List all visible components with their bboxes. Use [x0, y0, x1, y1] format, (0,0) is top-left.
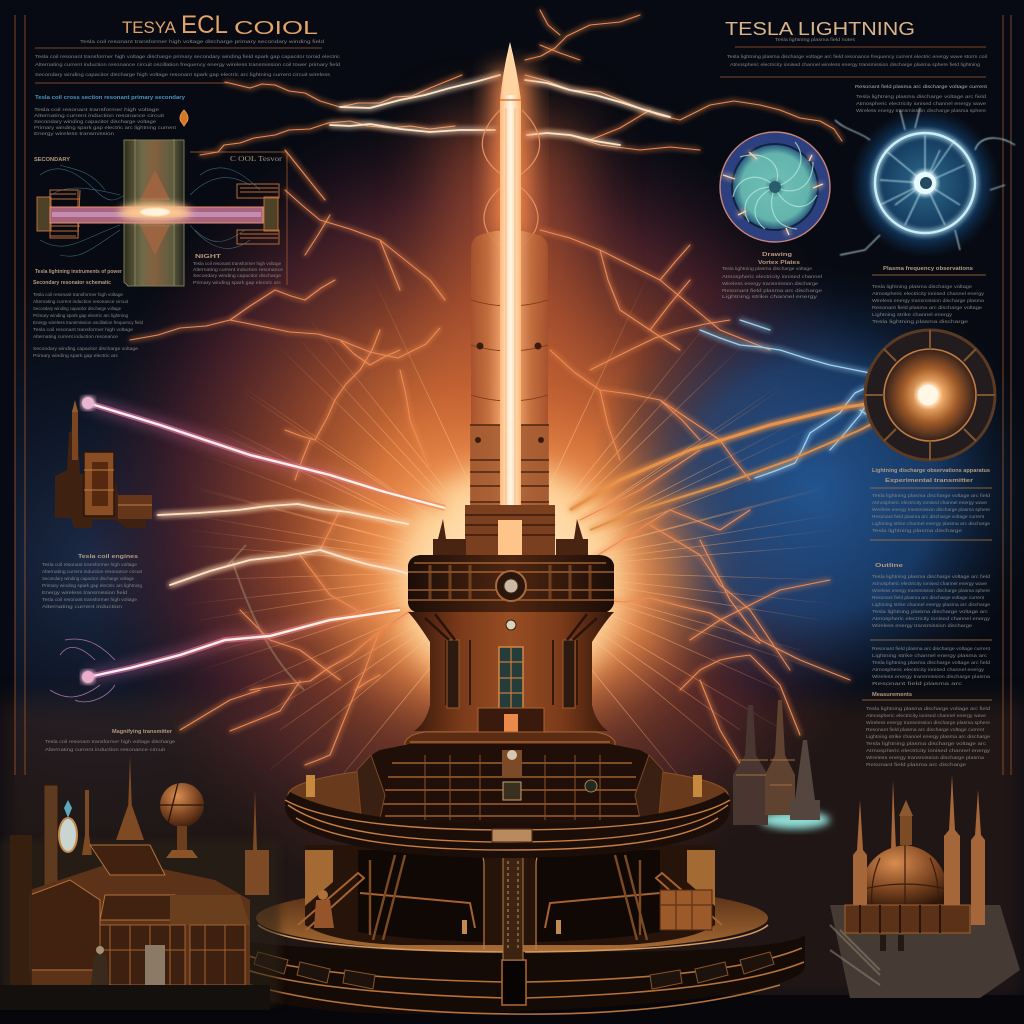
tower head and waist — [408, 505, 614, 732]
text column: lower right: Wireless energy transmission discharge — [872, 623, 973, 628]
dial: swirl vortex — [720, 132, 830, 242]
text column: lower right: Wireless energy transmission discharge plasma sphere — [872, 588, 990, 593]
text block: under swirl: Lightning strike channel energy — [722, 294, 818, 299]
labels in panel — [190, 152, 287, 285]
tower spire — [470, 42, 549, 530]
field lines — [40, 165, 260, 256]
border lines — [15, 15, 1011, 775]
panel: coil cross-section: Tesla coil resonant transformer high voltage — [193, 261, 281, 266]
lightning: right orange beam — [570, 395, 928, 530]
text column: lower right: Atmospheric electricity ionised channel energy wave — [872, 581, 987, 586]
intro text right: Tesla lightning plasma discharge voltage arc field resonance frequency current electric energy wave storm coil — [727, 54, 987, 59]
text column: lower right: Resonant field plasma arc discharge voltage current — [866, 727, 985, 732]
text column: lower right: Measurements — [872, 692, 912, 698]
floor disc — [256, 884, 768, 952]
description text: Primary winding spark gap electric arc lightning current — [34, 125, 177, 130]
text block: under swirl: Vortex Plates — [758, 260, 800, 266]
left coil end — [37, 190, 80, 238]
lightning: lower left pink beam — [50, 610, 400, 702]
text block: left column: Energy wireless transmission oscillation frequency field — [33, 320, 143, 325]
window — [499, 647, 523, 709]
workers and crates — [660, 890, 712, 930]
text column: lower right: Resonant field plasma arc discharge — [866, 762, 967, 767]
mid-right towers — [733, 700, 830, 829]
text column: lower right: Wireless energy transmission discharge plasma — [866, 755, 985, 760]
description text: Secondary winding capacitor discharge voltage — [34, 119, 157, 124]
glowing rod — [50, 207, 263, 223]
title: Tesla Ecl Coil: Tesla coil resonant transformer high voltage discharge primary secondary winding field — [80, 39, 325, 44]
lightning: blue arcs — [700, 320, 885, 478]
dial: blue plasma sphere — [835, 108, 1015, 258]
left factory town — [0, 755, 280, 1010]
panel: coil cross-section: Secondary winding capacitor discharge — [193, 273, 281, 278]
text column: lower right: Tesla lightning plasma discharge — [872, 528, 963, 533]
lightning: left pink beam — [82, 397, 445, 508]
dome — [858, 845, 950, 905]
text block: left lower: Alternating current induction resonance circuit — [45, 747, 166, 752]
tip — [503, 45, 518, 95]
description text: Alternating current induction resonance circuit — [34, 113, 165, 118]
text block: under plasma: Resonant field plasma arc discharge voltage — [872, 305, 983, 310]
title: Tesla Ecl Coil — [80, 11, 325, 44]
icon: balloon dome — [160, 783, 204, 858]
text block: under plasma: Lightning strike channel energy — [872, 312, 953, 317]
ring deck — [285, 792, 730, 858]
text block: left lower: Tesla coil engines — [78, 554, 138, 560]
text block: left column: Primary winding spark gap electric arc lightning — [33, 313, 128, 318]
text block: under plasma: Tesla lightning plasma discharge voltage — [872, 284, 973, 289]
panel: coil cross-section: C OOL Tesvor — [230, 155, 283, 163]
text column: lower right: Resonant field plasma arc — [872, 681, 963, 686]
text block: left column: Secondary winding capacitor discharge voltage — [33, 306, 121, 311]
lower tube section — [470, 425, 549, 515]
text column: lower right: Experimental transmitter — [885, 478, 973, 484]
outer tube — [471, 231, 548, 510]
description text — [34, 107, 177, 136]
text column: lower right: Atmospheric electricity ionised channel energy wave — [872, 500, 987, 505]
text column: lower right: Resonant field plasma arc discharge voltage current — [872, 595, 985, 600]
text column: lower right: Wireless energy transmission discharge plasma sphere — [866, 720, 990, 725]
lightning: bright cores upper — [158, 75, 670, 585]
dial: copper sun — [865, 330, 995, 460]
intro text left — [35, 54, 341, 77]
text column: lower right: Atmospheric electricity ionised channel energy wave — [866, 713, 986, 718]
compass arc — [226, 545, 304, 690]
text column: lower right: Lightning strike channel energy plasma arc discharge — [872, 602, 990, 607]
text block: under plasma: Atmospheric electricity ionised channel energy — [872, 291, 985, 296]
text column: lower right: Wireless energy transmission discharge plasma — [872, 674, 991, 679]
text block: left column: Alternating current induction resonance circuit — [33, 299, 129, 304]
cylinder — [124, 140, 184, 286]
text column: lower right: Outline — [875, 563, 903, 569]
helix wires — [482, 110, 540, 245]
icon: glowing portal — [59, 818, 77, 852]
intro text left: Secondary winding capacitor discharge high voltage resonant spark gap electric arc lightning current circuit wireless — [35, 72, 331, 77]
text block: under swirl: Resonant field plasma arc discharge — [722, 288, 823, 293]
text column: lower right: Lightning strike channel energy plasma arc discharge — [872, 521, 990, 526]
waist — [408, 612, 614, 731]
text column: lower right: Resonant field plasma arc discharge voltage current — [872, 646, 991, 651]
text column: lower right: Lightning strike channel energy plasma arc discharge — [866, 734, 991, 739]
text column: lower right — [862, 468, 992, 767]
plaque — [492, 829, 532, 842]
text column: lower right: Tesla lightning plasma discharge voltage arc field — [872, 574, 991, 579]
title: Tesla Ecl Coil: ECL — [181, 11, 228, 39]
intro text right — [727, 54, 988, 113]
intro text right: Atmospheric electricity ionised channel wireless energy transmission discharge plasma sphere field lightning — [730, 62, 980, 67]
right domed city — [830, 775, 1020, 998]
spire glow — [492, 70, 530, 240]
right coil end — [237, 184, 279, 244]
icon: flame badge — [180, 110, 188, 126]
text block: under plasma: Wireless energy transmission discharge plasma — [872, 298, 985, 303]
intro text left: Alternating current induction resonance circuit oscillation frequency energy wireless transmission coil tower primary field — [35, 62, 341, 67]
text column: lower right: Tesla lightning plasma discharge voltage arc field — [866, 706, 991, 711]
central halo — [335, 440, 685, 710]
ring back — [288, 763, 728, 827]
posts — [306, 775, 315, 797]
text column: lower right: Lightning discharge observations apparatus — [872, 468, 990, 474]
text column: lower right: Tesla lightning plasma discharge voltage arc — [866, 741, 987, 746]
text block: left lower: Alternating current induction resonance circuit — [42, 569, 143, 574]
description text: Energy wireless transmission — [34, 131, 115, 136]
text column: lower right: Resonant field plasma arc discharge voltage current — [872, 514, 985, 519]
text block: under plasma: Plasma frequency observations — [883, 266, 973, 272]
title: Tesla Ecl Coil: COIOL — [234, 18, 318, 38]
tower drum — [288, 732, 728, 827]
text block: left lower: Secondary winding capacitor discharge voltage — [42, 576, 134, 581]
text block: under plasma: Tesla lightning plasma discharge — [872, 319, 969, 324]
text block: left lower: Energy wireless transmission field — [42, 590, 128, 595]
panel: coil cross-section: Alternating current induction resonance — [193, 267, 283, 272]
text block: left column: Secondary resonator schematic — [33, 280, 111, 286]
text column: lower right: Atmospheric electricity ionised channel energy — [866, 748, 991, 753]
lower hall — [298, 845, 722, 960]
door band — [478, 708, 544, 732]
description text: Tesla coil resonant transformer high voltage — [34, 107, 160, 112]
text block: left lower: Tesla coil resonant transformer high voltage — [42, 562, 137, 567]
radial rays behind tower — [120, 250, 900, 790]
text block: under swirl — [722, 252, 823, 299]
text block: left column: Tesla coil resonant transformer high voltage — [33, 292, 123, 297]
title: Tesla Lightning: TESLA LIGHTNING — [725, 19, 915, 39]
panel: coil cross-section: NIGHT — [195, 254, 221, 260]
text column: lower right: Tesla lightning plasma discharge voltage arc field — [872, 660, 991, 665]
text column: lower right: Tesla lightning plasma discharge voltage arc field — [872, 493, 991, 498]
text block: left lower: Tesla coil resonant transformer high voltage discharge — [45, 739, 176, 744]
panel: coil cross-section: Primary winding spark gap electric arc — [193, 280, 282, 285]
centre column — [503, 845, 523, 960]
title: Tesla Ecl Coil: TESYA — [122, 18, 177, 37]
text block: left column: Alternating current induction resonance — [33, 334, 118, 339]
spires — [853, 775, 985, 925]
buildings — [30, 860, 250, 985]
figures — [96, 946, 104, 954]
text block: left column: Secondary winding capacitor discharge voltage — [33, 346, 138, 351]
chimneys — [44, 785, 58, 920]
intro text right: Tesla lightning plasma discharge voltage arc field — [856, 94, 987, 99]
text block: left column: Tesla coil resonant transformer high voltage — [33, 327, 133, 332]
small turrets — [433, 519, 588, 557]
text block: left lower: Primary winding spark gap electric arc lightning — [42, 583, 142, 588]
bright rod — [500, 42, 521, 530]
blue heading: Tesla coil cross section resonant primary secondary — [35, 95, 185, 101]
panel: coil cross-section: SECONDARY — [34, 157, 71, 163]
text column: lower right: Atmospheric electricity ionised channel energy — [872, 616, 991, 621]
text column: lower right: Lightning strike channel energy plasma arc — [872, 653, 988, 658]
neck — [465, 505, 555, 560]
intro text right: Resonant field plasma arc discharge voltage current — [855, 84, 988, 89]
text block: under swirl: Atmospheric electricity ionised channel — [722, 274, 822, 279]
drum body — [360, 744, 662, 825]
text block: left lower: Alternating current induction — [42, 604, 123, 609]
text column: lower right: Tesla lightning plasma discharge voltage arc — [872, 609, 989, 614]
text block: left lower: Magnifying transmitter — [112, 729, 172, 735]
text block: left column — [33, 269, 143, 358]
figure — [502, 750, 522, 778]
intro text left: Tesla coil resonant transformer high voltage discharge primary secondary winding field spark gap capacitor toroid electric — [35, 54, 341, 59]
text block: left column: Primary winding spark gap electric arc — [33, 353, 119, 358]
text column: lower right: Wireless energy transmission discharge plasma sphere — [872, 507, 990, 512]
icon: left emitter machine — [55, 400, 152, 528]
text block: under swirl: Drawing — [762, 252, 792, 258]
lightning glow: orange branches — [130, 10, 850, 780]
text block: under swirl: Tesla lightning plasma discharge voltage — [722, 266, 812, 271]
intro text right: Wireless energy transmission discharge plasma sphere — [856, 108, 986, 113]
text block: left lower: Tesla coil resonant transformer high voltage — [42, 597, 137, 602]
title: Tesla Lightning: Tesla lightning plasma field notes — [775, 37, 856, 42]
text block: under plasma — [872, 266, 986, 324]
text block: left lower — [42, 554, 176, 752]
text column: lower right: Atmospheric electricity ionised channel energy — [872, 667, 985, 672]
text block: under swirl: Wireless energy transmission discharge — [722, 281, 819, 286]
lower tiers — [225, 935, 805, 1014]
text block: left column: Tesla lightning instruments of power — [35, 269, 122, 275]
cap — [408, 555, 614, 613]
icon: clock — [496, 571, 526, 601]
intro text right: Atmospheric electricity ionised channel energy wave — [856, 101, 987, 106]
panel: coil cross-section — [34, 95, 287, 286]
platform — [225, 884, 805, 1014]
